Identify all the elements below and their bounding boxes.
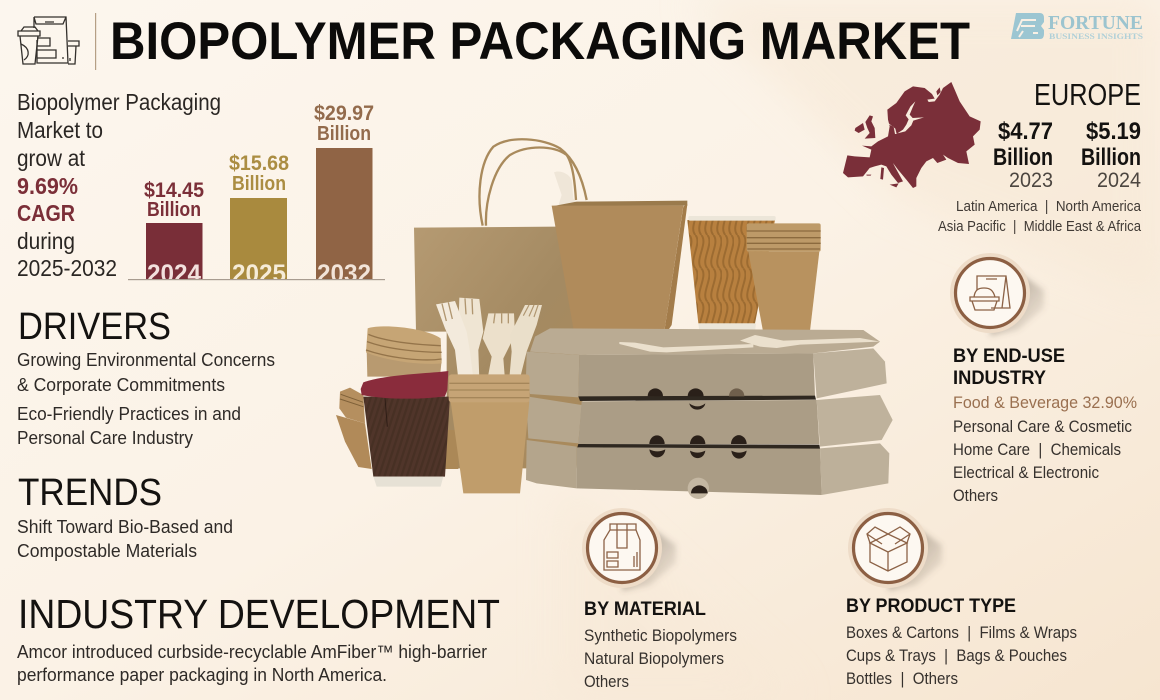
text: CAGR statement: 9.69%: [17, 173, 78, 199]
text: CAGR statement: grow at: [17, 145, 86, 171]
bag lower part: [445, 430, 458, 469]
panel: by material: BY MATERIAL: [584, 598, 706, 620]
bag, food box and upper cups: [414, 139, 821, 468]
bar 2025: [229, 152, 289, 288]
panel: drivers: Growing Environmental Concerns: [17, 350, 275, 370]
value 2023: [993, 118, 1053, 192]
panel: by material: Natural Biopolymers: [584, 650, 724, 668]
bar 2025: 2025: [232, 260, 286, 288]
pizza box stack: [526, 328, 893, 499]
panel: trends: Compostable Materials: [17, 541, 197, 561]
flat wooden forks: [619, 335, 880, 352]
top box: [526, 348, 887, 398]
bowl stack: [366, 326, 442, 377]
panel: by product type: BY PRODUCT TYPE: [846, 595, 1016, 617]
value 2024: 2024: [1097, 169, 1141, 192]
panel: by end-use industry: Food & Beverage 32.90%: [953, 394, 1137, 412]
box lid top: [530, 328, 880, 355]
wooden fork 1: [436, 301, 473, 379]
bar 2024: Billion: [147, 199, 201, 221]
logo: Fortune Business Insights: BUSINESS INSIGHTS: [1049, 31, 1143, 41]
panel: by end-use industry: INDUSTRY: [953, 367, 1046, 389]
left group: bowls, forks, cups: [336, 298, 542, 493]
bar 2025: Billion: [232, 173, 286, 195]
panel: by end-use industry: Electrical & Electronic: [953, 464, 1099, 482]
panel: by end-use industry: Personal Care & Cosmetic: [953, 418, 1132, 436]
value 2024: Billion: [1081, 144, 1141, 171]
icon: material bag: [582, 508, 676, 591]
panel: industry development: [17, 591, 500, 685]
text: CAGR statement: during: [17, 228, 75, 254]
title: BIOPOLYMER PACKAGING MARKET: [110, 12, 970, 71]
icon: food container and bag: [950, 253, 1044, 336]
logo: Fortune Business Insights: FORTUNE: [1048, 12, 1143, 34]
panel: by material: Synthetic Biopolymers: [584, 627, 737, 645]
panel: industry development: Amcor introduced curbside-recyclable AmFiber™ high-barrier: [17, 642, 487, 662]
bag: [414, 139, 597, 468]
value 2023: 2023: [1009, 169, 1053, 192]
map: Europe: [843, 82, 981, 188]
middle box: [527, 395, 893, 447]
panel: by product type: [846, 508, 1077, 688]
panel: trends: Shift Toward Bio-Based and: [17, 517, 233, 537]
other regions: [938, 199, 1142, 235]
value 2023: Billion: [993, 144, 1053, 171]
logo: Fortune Business Insights: [1011, 12, 1143, 41]
panel: drivers: Eco-Friendly Practices in and: [17, 404, 241, 424]
ripple cup: [687, 216, 776, 332]
wooden fork 3: [483, 313, 515, 380]
icon: packaging header: [18, 17, 79, 64]
bar 2024: $14.45: [144, 179, 204, 202]
panel: by product type: Cups & Trays | Bags & Pouches: [846, 647, 1067, 665]
panel: by product type: Boxes & Cartons | Films & Wraps: [846, 624, 1077, 642]
hand holes: [648, 388, 747, 499]
other regions: Asia Pacific | Middle East & Africa: [938, 219, 1142, 235]
header divider: [95, 13, 96, 70]
panel: drivers: [17, 306, 275, 448]
panel: industry development: performance paper packaging in North America.: [17, 665, 387, 685]
bar 2032: 2032: [317, 260, 371, 288]
other regions: Latin America | North America: [956, 199, 1142, 215]
side trays: [336, 388, 372, 469]
text: CAGR statement: CAGR: [17, 200, 75, 226]
bar 2024: [144, 181, 204, 279]
panel: Europe: [843, 77, 1142, 235]
icon: open box: [848, 508, 942, 591]
bar 2032: $29.97: [314, 102, 374, 125]
panel: trends: [17, 472, 233, 561]
panel: by material: Others: [584, 673, 629, 691]
dark cup with red lid: [361, 371, 450, 487]
panel: by product type: Bottles | Others: [846, 670, 958, 688]
panel: by end-use industry: [950, 253, 1137, 505]
value 2023: $4.77: [998, 118, 1053, 145]
bar 2032: Billion: [317, 123, 371, 145]
text: CAGR statement: Market to: [17, 117, 103, 143]
panel: by end-use industry: Home Care | Chemicals: [953, 441, 1121, 459]
bar 2025: $15.68: [229, 152, 289, 175]
bar 2032: [314, 102, 374, 288]
text: CAGR statement: Biopolymer Packaging: [17, 89, 221, 115]
stacked kraft cup: [747, 223, 821, 337]
panel: by end-use industry: BY END-USE: [953, 345, 1065, 367]
text: CAGR statement: 2025-2032: [17, 255, 117, 281]
panel: drivers: & Corporate Commitments: [17, 375, 225, 395]
front kraft cup: [449, 374, 530, 493]
panel: drivers: Personal Care Industry: [17, 428, 193, 448]
value 2024: [1081, 118, 1141, 192]
panel: industry development: INDUSTRY DEVELOPMENT: [18, 591, 500, 637]
wooden fork 4: [509, 304, 542, 378]
bar chart: market size: [128, 102, 385, 288]
panel: by material: [582, 508, 737, 691]
photo: kraft packaging products: [336, 139, 893, 499]
text: CAGR statement: [17, 89, 221, 281]
panel: drivers: DRIVERS: [18, 306, 171, 348]
food box: [552, 201, 687, 338]
wooden fork 2: [458, 298, 483, 380]
bar 2024: 2024: [147, 260, 201, 288]
value 2024: $5.19: [1086, 118, 1141, 145]
panel: by end-use industry: Others: [953, 487, 998, 505]
bottom box: [526, 440, 889, 495]
panel: trends: TRENDS: [18, 472, 162, 514]
